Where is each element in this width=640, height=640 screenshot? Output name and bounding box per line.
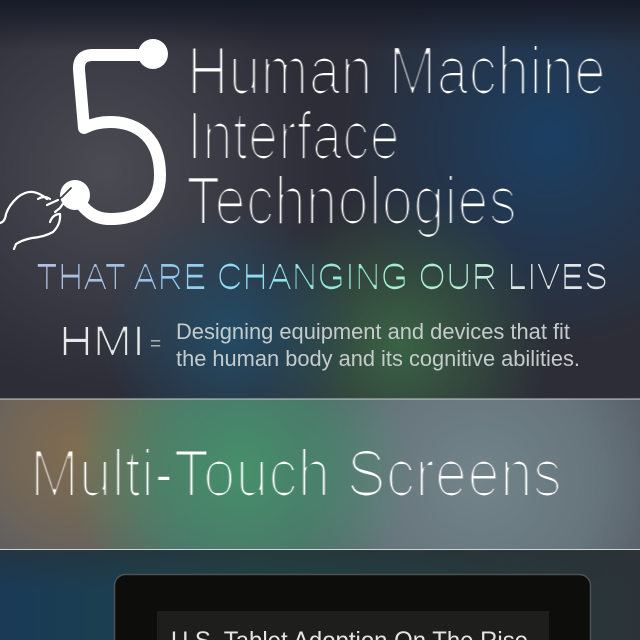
HMI definition: the human body and its cognitive abilities. (176, 346, 580, 371)
HMI definition: = (150, 334, 161, 355)
HMI definition: Designing equipment and devices that fit (176, 319, 571, 344)
subtitle: THAT ARE CHANGING OUR LIVES (36, 256, 608, 297)
HMI definition (59, 318, 580, 371)
background: header (0, 0, 640, 400)
section heading: Multi-Touch Screens (30, 436, 562, 510)
title: Interface (187, 98, 400, 174)
tablet device (114, 574, 590, 640)
section band (0, 398, 640, 550)
icon: number 5 (60, 39, 168, 219)
title: Technologies (186, 163, 517, 239)
background: lower section (0, 550, 640, 640)
title (186, 33, 606, 239)
tablet screen (157, 611, 549, 640)
icon: pointing hand (0, 188, 71, 249)
HMI definition: HMI (59, 318, 145, 364)
